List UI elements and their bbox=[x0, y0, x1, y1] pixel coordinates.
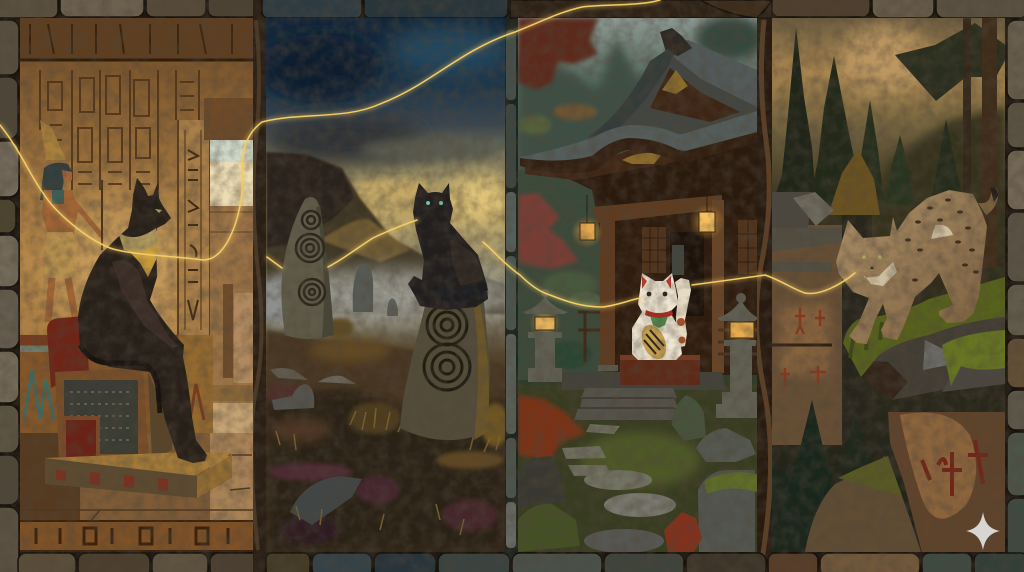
bottom frame bbox=[266, 553, 1024, 572]
icon: sparkle watermark bbox=[966, 512, 1000, 550]
panel: Japanese shrine bbox=[518, 16, 764, 553]
throne bbox=[47, 316, 173, 460]
temple frieze bbox=[20, 18, 253, 60]
valley mist bbox=[250, 269, 520, 326]
panel: Celtic moor bbox=[266, 18, 505, 552]
hieroglyph wall bbox=[40, 70, 199, 190]
throne base bbox=[45, 452, 232, 498]
doorway and courtyard bbox=[204, 98, 253, 406]
painted Egyptian figure bbox=[40, 120, 102, 322]
right frame stones bbox=[1007, 20, 1024, 572]
garden bushes bbox=[542, 271, 601, 369]
spiral standing stones bbox=[281, 197, 398, 339]
moorland bbox=[266, 318, 509, 552]
top frame bbox=[262, 0, 1024, 18]
stone lanterns bbox=[523, 289, 759, 418]
misty forest bbox=[518, 16, 764, 380]
icon: black long-haired cat bbox=[408, 183, 488, 310]
panel: Egypt bbox=[20, 18, 253, 552]
icon: lynx bbox=[836, 188, 998, 344]
icon: black Egyptian cat bbox=[78, 178, 207, 463]
hieroglyph column bbox=[178, 120, 210, 335]
icon: maneki-neko cat bbox=[620, 273, 700, 385]
dusk glow bbox=[839, 26, 931, 94]
red maple top bbox=[518, 18, 598, 269]
floor bbox=[20, 403, 253, 524]
cliff bbox=[805, 277, 1005, 553]
divider bark bbox=[251, 0, 772, 572]
big carved stone bbox=[400, 302, 490, 440]
shrine roof bbox=[520, 28, 757, 173]
mountains bbox=[266, 152, 505, 314]
hanging lanterns bbox=[572, 195, 724, 247]
panel: lynx cliff bbox=[772, 18, 1011, 553]
shrine building bbox=[525, 124, 757, 375]
pine forest bbox=[772, 18, 1011, 268]
left frame stones bbox=[0, 0, 264, 572]
storm clouds bbox=[260, 26, 514, 220]
golden thread bbox=[0, 0, 855, 307]
garden ground bbox=[518, 372, 757, 553]
rock wall with cave art bbox=[772, 192, 872, 445]
hieroglyph floor band bbox=[20, 521, 253, 552]
painted wall base bbox=[20, 335, 213, 433]
rocks and moss bbox=[518, 395, 757, 552]
lower forest bbox=[788, 400, 833, 506]
